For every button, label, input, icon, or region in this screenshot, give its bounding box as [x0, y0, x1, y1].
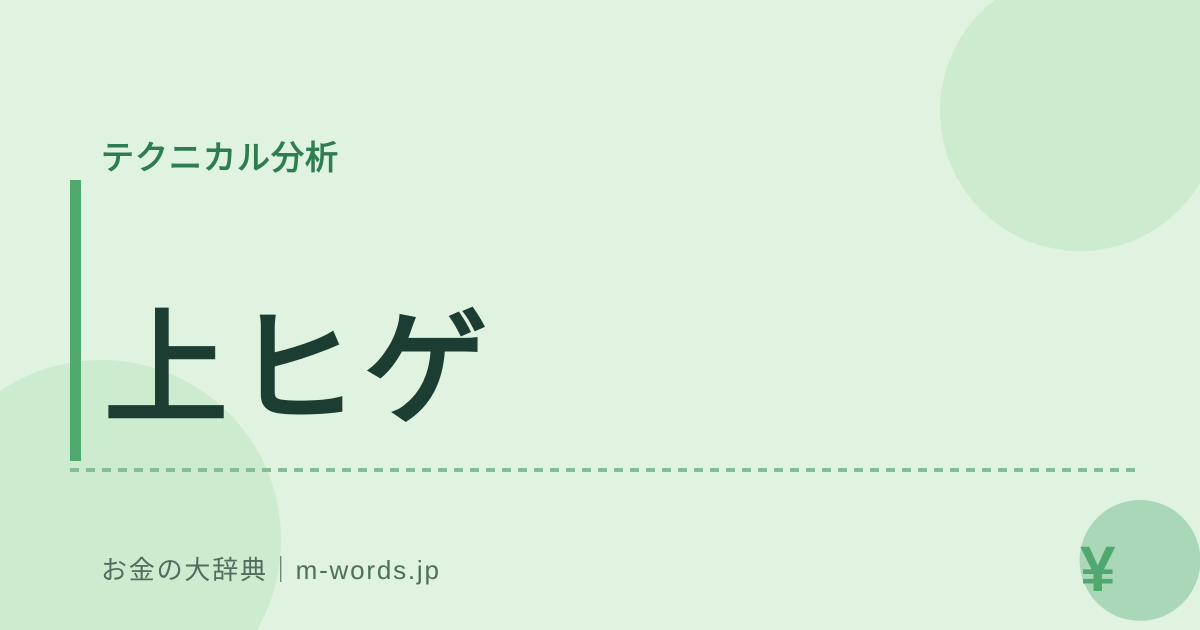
- circle: bottom left decoration: [0, 360, 281, 630]
- icon: yen sign: ¥: [1080, 533, 1116, 605]
- circle: bottom right badge: [1080, 500, 1200, 621]
- title: 上ヒゲ: [104, 302, 494, 439]
- circle: top right decoration: [940, 0, 1200, 251]
- footer site name: お金の大辞典｜m-words.jp: [101, 555, 441, 585]
- category label: テクニカル分析: [101, 141, 339, 177]
- dashed divider: [70, 468, 1135, 472]
- accent bar: [70, 180, 81, 461]
